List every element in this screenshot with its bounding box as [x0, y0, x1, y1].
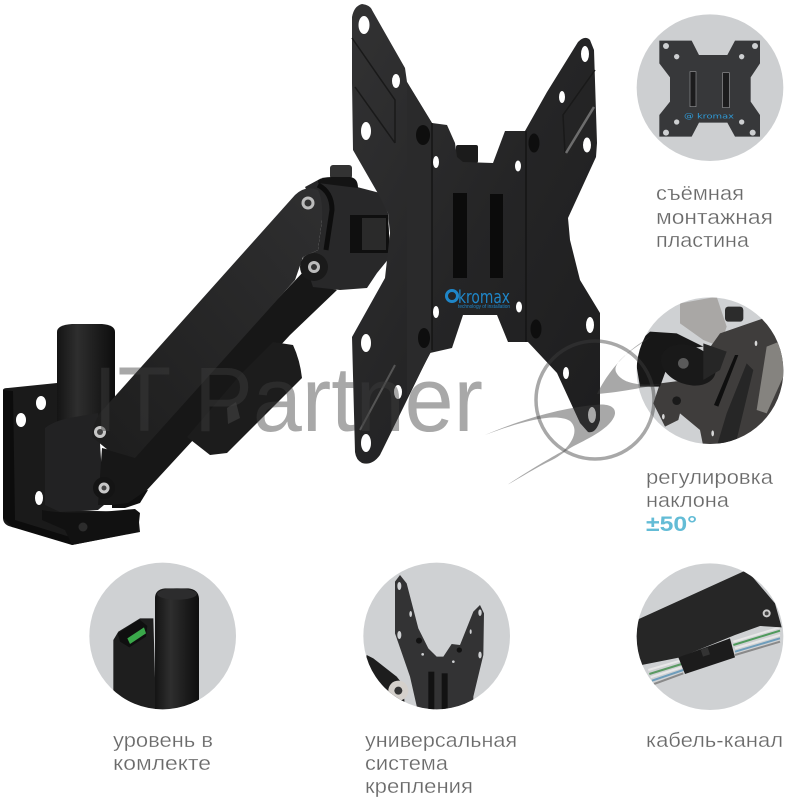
small arm bracket — [112, 490, 148, 508]
panel: removable mounting plate — [637, 14, 783, 252]
caption: система — [365, 753, 449, 775]
head notch — [350, 215, 390, 253]
brand logo on plate: kromax — [458, 287, 510, 308]
pole — [57, 324, 115, 430]
caption: комлекте — [113, 753, 211, 775]
inset: tilt photo — [633, 293, 786, 450]
cable cover — [187, 342, 302, 455]
caption — [646, 467, 774, 512]
caption: монтажная — [656, 207, 773, 229]
panel: cable channel — [633, 560, 786, 752]
sleeve — [45, 413, 104, 512]
caption: регулировка — [646, 467, 774, 489]
VESA plate — [352, 4, 600, 464]
brand logo on plate: technology of installation — [458, 304, 510, 310]
inset: universal plate photo — [360, 560, 513, 713]
arm bolts — [93, 185, 332, 499]
panel: level included — [87, 560, 240, 775]
plate slots — [453, 193, 503, 278]
caption: уровень в — [113, 730, 213, 752]
brand logo on plate — [446, 287, 510, 310]
caption: универсальная — [365, 730, 517, 752]
inset: plate photo: @ kromax — [684, 112, 735, 121]
caption: кабель-канал — [646, 730, 783, 752]
plate holes — [358, 16, 596, 452]
caption: съёмная — [656, 183, 744, 205]
caption: наклона — [646, 490, 730, 512]
lower arm — [98, 270, 337, 505]
panel: universal mounting system — [360, 560, 517, 798]
upper arm panel — [92, 188, 322, 458]
inset: level photo — [87, 560, 240, 713]
cable cover clip — [227, 402, 240, 424]
inset: cable photo — [633, 560, 786, 713]
watermark logo — [485, 336, 662, 485]
caption: пластина — [656, 230, 750, 252]
inset: plate photo — [637, 14, 783, 161]
wall plate — [3, 383, 140, 545]
watermark text: IT Partner — [93, 349, 483, 451]
tilt knob — [318, 165, 358, 188]
collar — [42, 509, 140, 545]
product: wall mount arm — [3, 4, 600, 545]
caption — [656, 183, 773, 252]
arm head — [303, 180, 390, 290]
plate rivets — [416, 125, 542, 348]
caption — [113, 730, 213, 775]
panel: tilt adjustment — [633, 293, 786, 536]
highlight value: ±50° — [646, 513, 697, 536]
caption — [365, 730, 517, 798]
caption: крепления — [365, 776, 473, 798]
